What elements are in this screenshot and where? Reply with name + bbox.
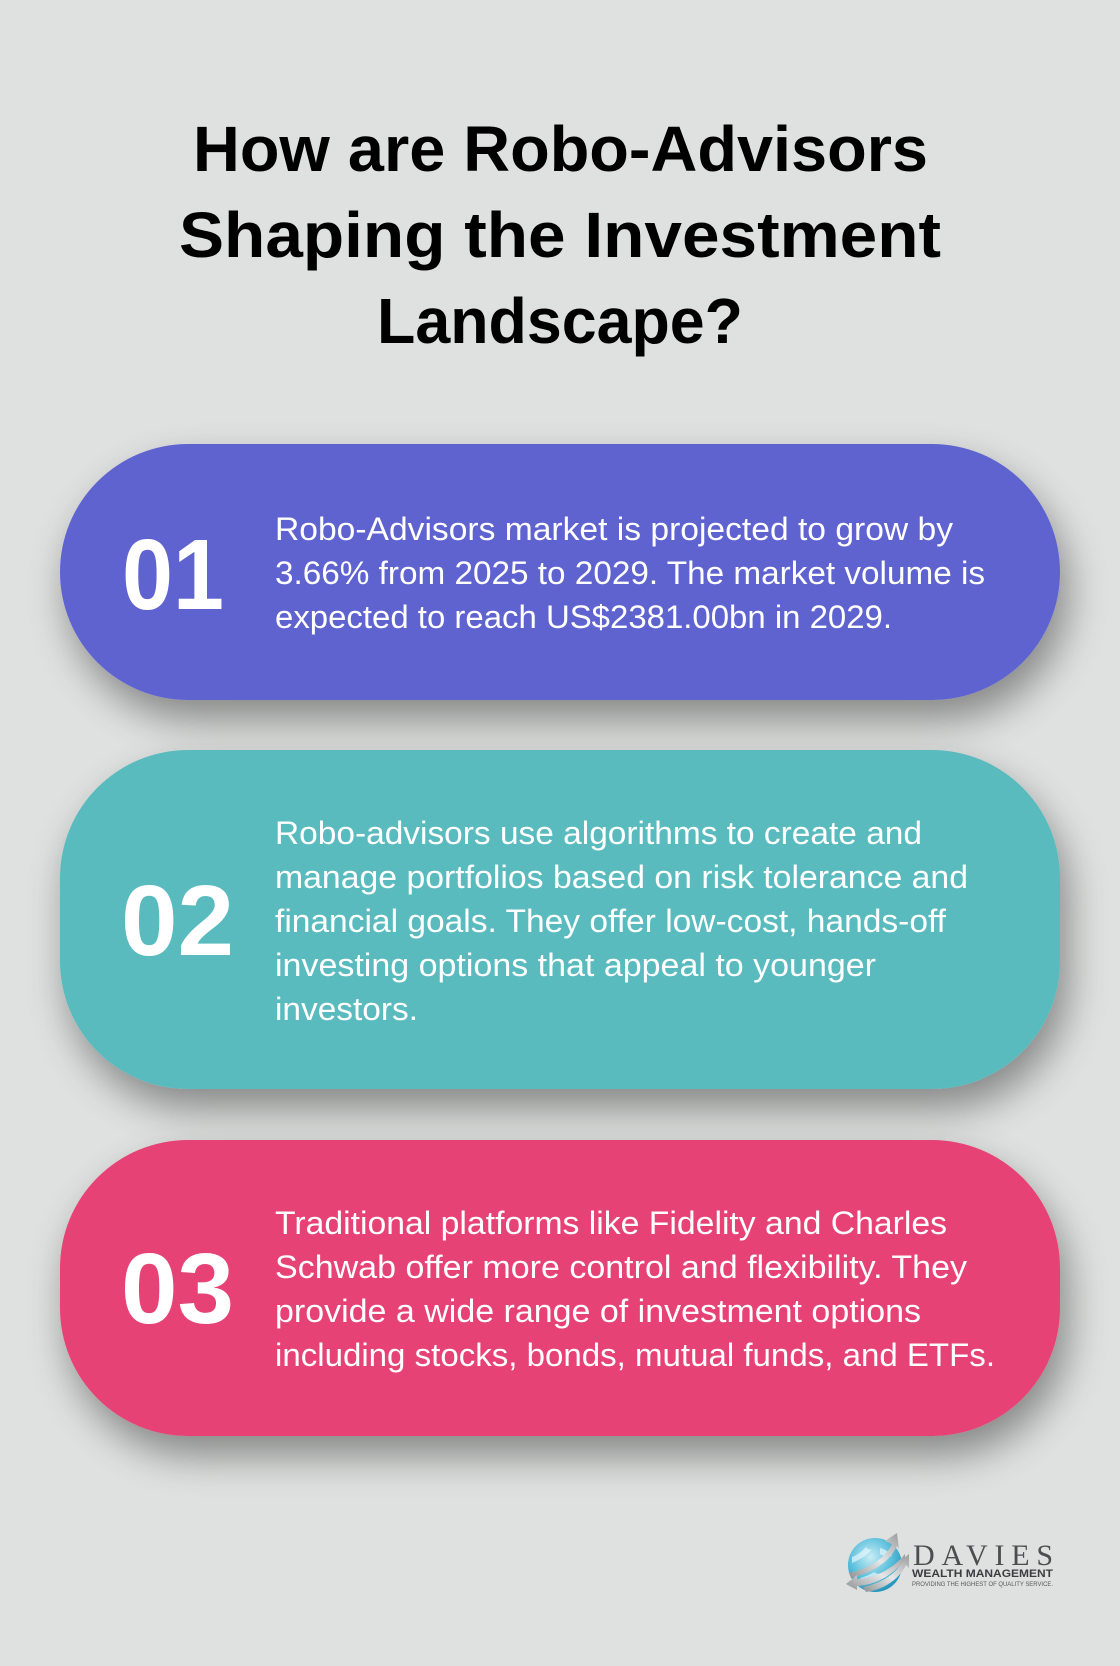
title: How are Robo-Advisors <box>193 113 928 185</box>
text block 02: Robo-advisors use algorithms to create and <box>275 815 922 851</box>
icon: globe with arrows <box>846 1533 909 1592</box>
arrow: lower swoosh <box>863 1554 909 1592</box>
panel: step 01 <box>60 444 1060 700</box>
text block 03 <box>275 1205 995 1373</box>
wordmark: DAVIES: DAVIES <box>913 1539 1053 1572</box>
number 02: 02 <box>121 865 234 977</box>
text block 01 <box>275 511 985 635</box>
pill background 01 <box>60 444 1060 700</box>
text block 02: investors. <box>275 991 418 1027</box>
text block 01: 3.66% from 2025 to 2029. The market volume is <box>275 555 985 591</box>
text block 02: financial goals. They offer low-cost, hands-off <box>275 903 946 939</box>
panel: step 02 <box>60 750 1060 1089</box>
title <box>179 113 941 357</box>
tagline: PROVIDING THE HIGHEST OF QUALITY SERVICE. <box>912 1581 1053 1588</box>
text block 02 <box>275 815 968 1027</box>
text block 03: Traditional platforms like Fidelity and Charles <box>275 1205 947 1241</box>
title: Shaping the Investment <box>179 199 941 271</box>
text block 01: Robo-Advisors market is projected to grow by <box>275 511 953 547</box>
text block 03: provide a wide range of investment options <box>275 1293 921 1329</box>
pill background 02 <box>60 750 1060 1089</box>
text block 01: expected to reach US$2381.00bn in 2029. <box>275 599 892 635</box>
number 03: 03 <box>121 1233 234 1345</box>
text block 02: investing options that appeal to younger <box>275 947 876 983</box>
pill background 03 <box>60 1140 1060 1436</box>
number 01: 01 <box>122 519 224 631</box>
title: Landscape? <box>377 285 743 357</box>
logo: Davies Wealth Management <box>846 1533 1053 1592</box>
panel: step 03 <box>60 1140 1060 1436</box>
text block 02: manage portfolios based on risk tolerance and <box>275 859 968 895</box>
text block 03: including stocks, bonds, mutual funds, and ETFs. <box>275 1337 995 1373</box>
wordmark: WEALTH MANAGEMENT: WEALTH MANAGEMENT <box>912 1568 1053 1580</box>
arrow: upper swoosh <box>849 1533 899 1578</box>
arrow: left swoosh <box>846 1554 905 1590</box>
text block 03: Schwab offer more control and flexibility. They <box>275 1249 967 1285</box>
